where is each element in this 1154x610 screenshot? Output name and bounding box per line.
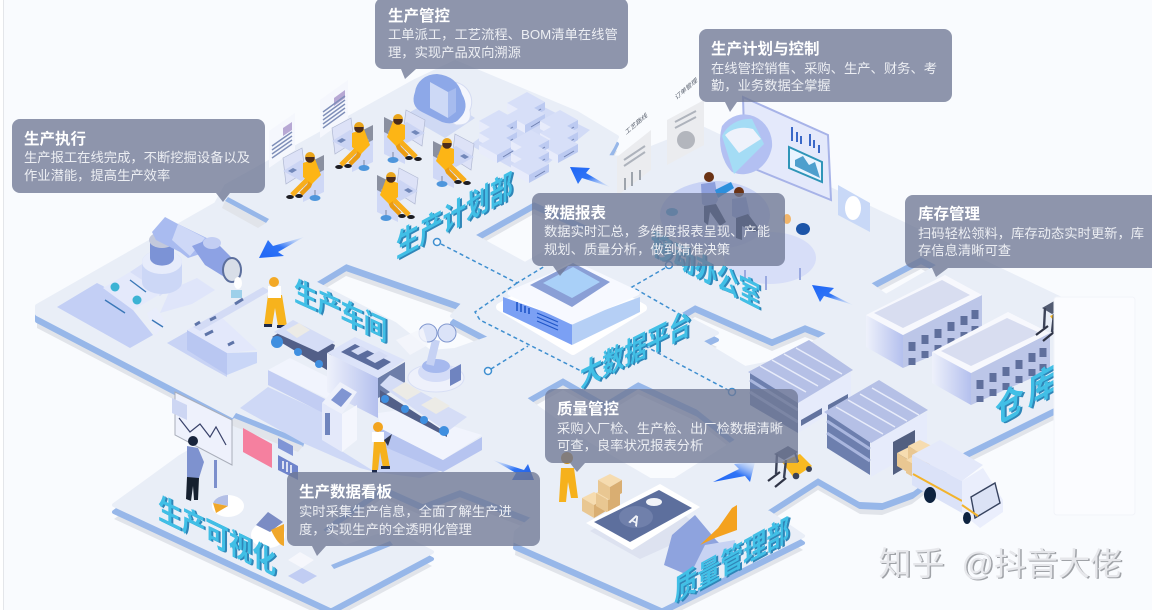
right conveyor — [380, 375, 467, 437]
work tables — [167, 277, 270, 377]
machine base — [57, 262, 215, 348]
delivery truck — [912, 440, 1003, 528]
small chart panels — [278, 438, 298, 480]
callout: inventory: 扫码轻松领料，库存动态实时更新，库 — [918, 226, 1144, 241]
forklift — [768, 446, 812, 487]
watermark: @抖音大佬 — [963, 547, 1124, 583]
callout: production execution: 生产执行 — [24, 129, 86, 148]
left conveyor — [271, 320, 335, 370]
icon: doc order — [667, 75, 704, 165]
worker with helmet — [559, 452, 578, 502]
callout: production control — [375, 0, 628, 79]
panel: visualisation area — [172, 392, 317, 584]
connector nodes — [434, 238, 736, 396]
shed two — [824, 380, 928, 477]
panel: big data platform — [500, 263, 643, 351]
arrow: conveyor to quality — [493, 460, 534, 480]
arrow: warehouse to office — [812, 285, 853, 305]
callout: quality control: 采购入厂检、生产检、出厂检数据清晰 — [557, 421, 783, 436]
callout: production execution — [12, 119, 265, 202]
icon: doc process: 工艺路线 — [624, 110, 648, 137]
callout: data reports: 规划、质量分析，做到精准决策 — [544, 241, 730, 257]
panel: quality management — [559, 452, 737, 576]
label: production workshop: 生产车间 — [296, 276, 389, 349]
panel: warehouse — [748, 275, 1080, 528]
small isometric tiles — [288, 552, 317, 584]
shed one — [748, 340, 853, 433]
callout: inventory: 库存管理 — [918, 204, 981, 223]
label: warehouse: 仓库 — [997, 358, 1063, 434]
label: visualisation: 生产可视化 — [160, 491, 278, 582]
cardboard boxes near truck — [897, 440, 932, 480]
callout: quality control: 质量管控 — [557, 399, 620, 418]
label: visualisation: 生产可视化 — [158, 490, 276, 581]
icon: cloud — [405, 74, 475, 138]
people at table — [701, 172, 760, 240]
callout: production dashboard: 度，实现生产的全透明化管理 — [299, 521, 472, 537]
arrow: planning to workshop — [259, 237, 304, 258]
control kiosk — [322, 382, 357, 452]
callout: inventory: 存信息清晰可查 — [918, 242, 1011, 258]
building one — [866, 275, 982, 368]
blank white panel at right — [1054, 297, 1135, 515]
conveyor platform — [240, 358, 482, 478]
callout: production execution: 生产报工在线完成，不断挖掘设备以及 — [24, 149, 250, 165]
presenter — [186, 436, 204, 501]
watermark: @抖音大佬 — [962, 546, 1122, 582]
small pie panel — [838, 185, 870, 232]
label: production planning department: 生产计划部 — [396, 167, 513, 266]
tablet with grade A: A — [626, 511, 643, 531]
forklift right, partly hidden — [1036, 300, 1080, 341]
tablet with grade A — [586, 484, 702, 559]
panel: workshop robot cell — [57, 217, 287, 377]
connector lines — [441, 244, 728, 390]
worker with tablet — [264, 277, 287, 328]
arrow: office to planning — [570, 167, 610, 187]
callout: data reports: 数据实时汇总，多维度报表呈现、产能 — [544, 223, 770, 239]
callout: production dashboard: 实时采集生产信息，全面了解生产进 — [299, 503, 512, 519]
pink panel — [243, 428, 272, 468]
label: quality management department: 质量管理部 — [674, 511, 789, 608]
callout: inventory — [905, 195, 1152, 277]
robot arm — [142, 217, 241, 294]
icon: document one — [269, 113, 295, 168]
worker at desk A — [283, 148, 324, 202]
worker at desk D — [433, 134, 474, 188]
arrow: quality to warehouse — [713, 462, 755, 482]
pie chart two — [251, 512, 285, 548]
icon: document two — [320, 80, 348, 138]
robot arm two — [396, 324, 464, 392]
callout: production planning and control: 勤，业务数据全掌握 — [711, 77, 831, 93]
label: big data platform: 大数据平台 — [582, 306, 693, 396]
label: mobile office: 移动办公室 — [651, 226, 760, 315]
callout: production dashboard — [287, 472, 540, 556]
callout: production execution: 作业潜能，提高生产效率 — [24, 167, 170, 183]
label: production workshop: 生产车间 — [294, 275, 387, 348]
icon: doc process — [617, 110, 651, 196]
callout: production control: 理，实现产品双向溯源 — [388, 45, 521, 60]
worker with clipboard — [372, 422, 392, 473]
icon: server stacks — [470, 92, 590, 183]
panel: conveyor line — [240, 320, 482, 478]
watermark: 知乎 — [878, 545, 944, 582]
callout: quality control: 可查，良率状况报表分析 — [557, 437, 703, 453]
callout: production planning and control: 在线管控销售、采购、生产、财务、考 — [711, 61, 937, 76]
callout: production control: 生产管控 — [388, 6, 451, 25]
label: big data platform: 大数据平台 — [580, 305, 691, 395]
callout: production planning and control — [699, 29, 952, 112]
callout: production dashboard: 生产数据看板 — [299, 483, 393, 501]
watermark: 知乎 — [880, 546, 946, 583]
icon: doc order: 订单管理 — [674, 75, 698, 102]
watermark — [878, 545, 1124, 583]
label: warehouse: 仓库 — [995, 357, 1061, 433]
callout: data reports — [532, 193, 785, 276]
label: quality management department: 质量管理部 — [676, 512, 791, 609]
cardboard boxes — [582, 474, 622, 518]
central machine — [327, 337, 405, 418]
building two — [932, 312, 1050, 405]
panel: production planning department — [269, 74, 590, 222]
label: mobile office: 移动办公室 — [653, 227, 762, 316]
mountain chart — [664, 505, 737, 576]
chart board — [172, 392, 232, 488]
callout: quality control — [545, 389, 798, 472]
worker at desk E — [377, 168, 418, 222]
worker at desk C — [384, 110, 425, 164]
panel: office — [617, 75, 870, 290]
big pie — [720, 114, 772, 174]
meeting table — [660, 181, 816, 290]
worker at desk B — [332, 118, 373, 172]
callout: data reports: 数据报表 — [544, 203, 607, 222]
label: production planning department: 生产计划部 — [398, 168, 515, 267]
pie chart one — [212, 495, 244, 517]
callout: production control: 工单派工，工艺流程、BOM清单在线管 — [388, 27, 618, 42]
callout: production planning and control: 生产计划与控制 — [711, 39, 820, 58]
big monitor — [743, 97, 831, 200]
